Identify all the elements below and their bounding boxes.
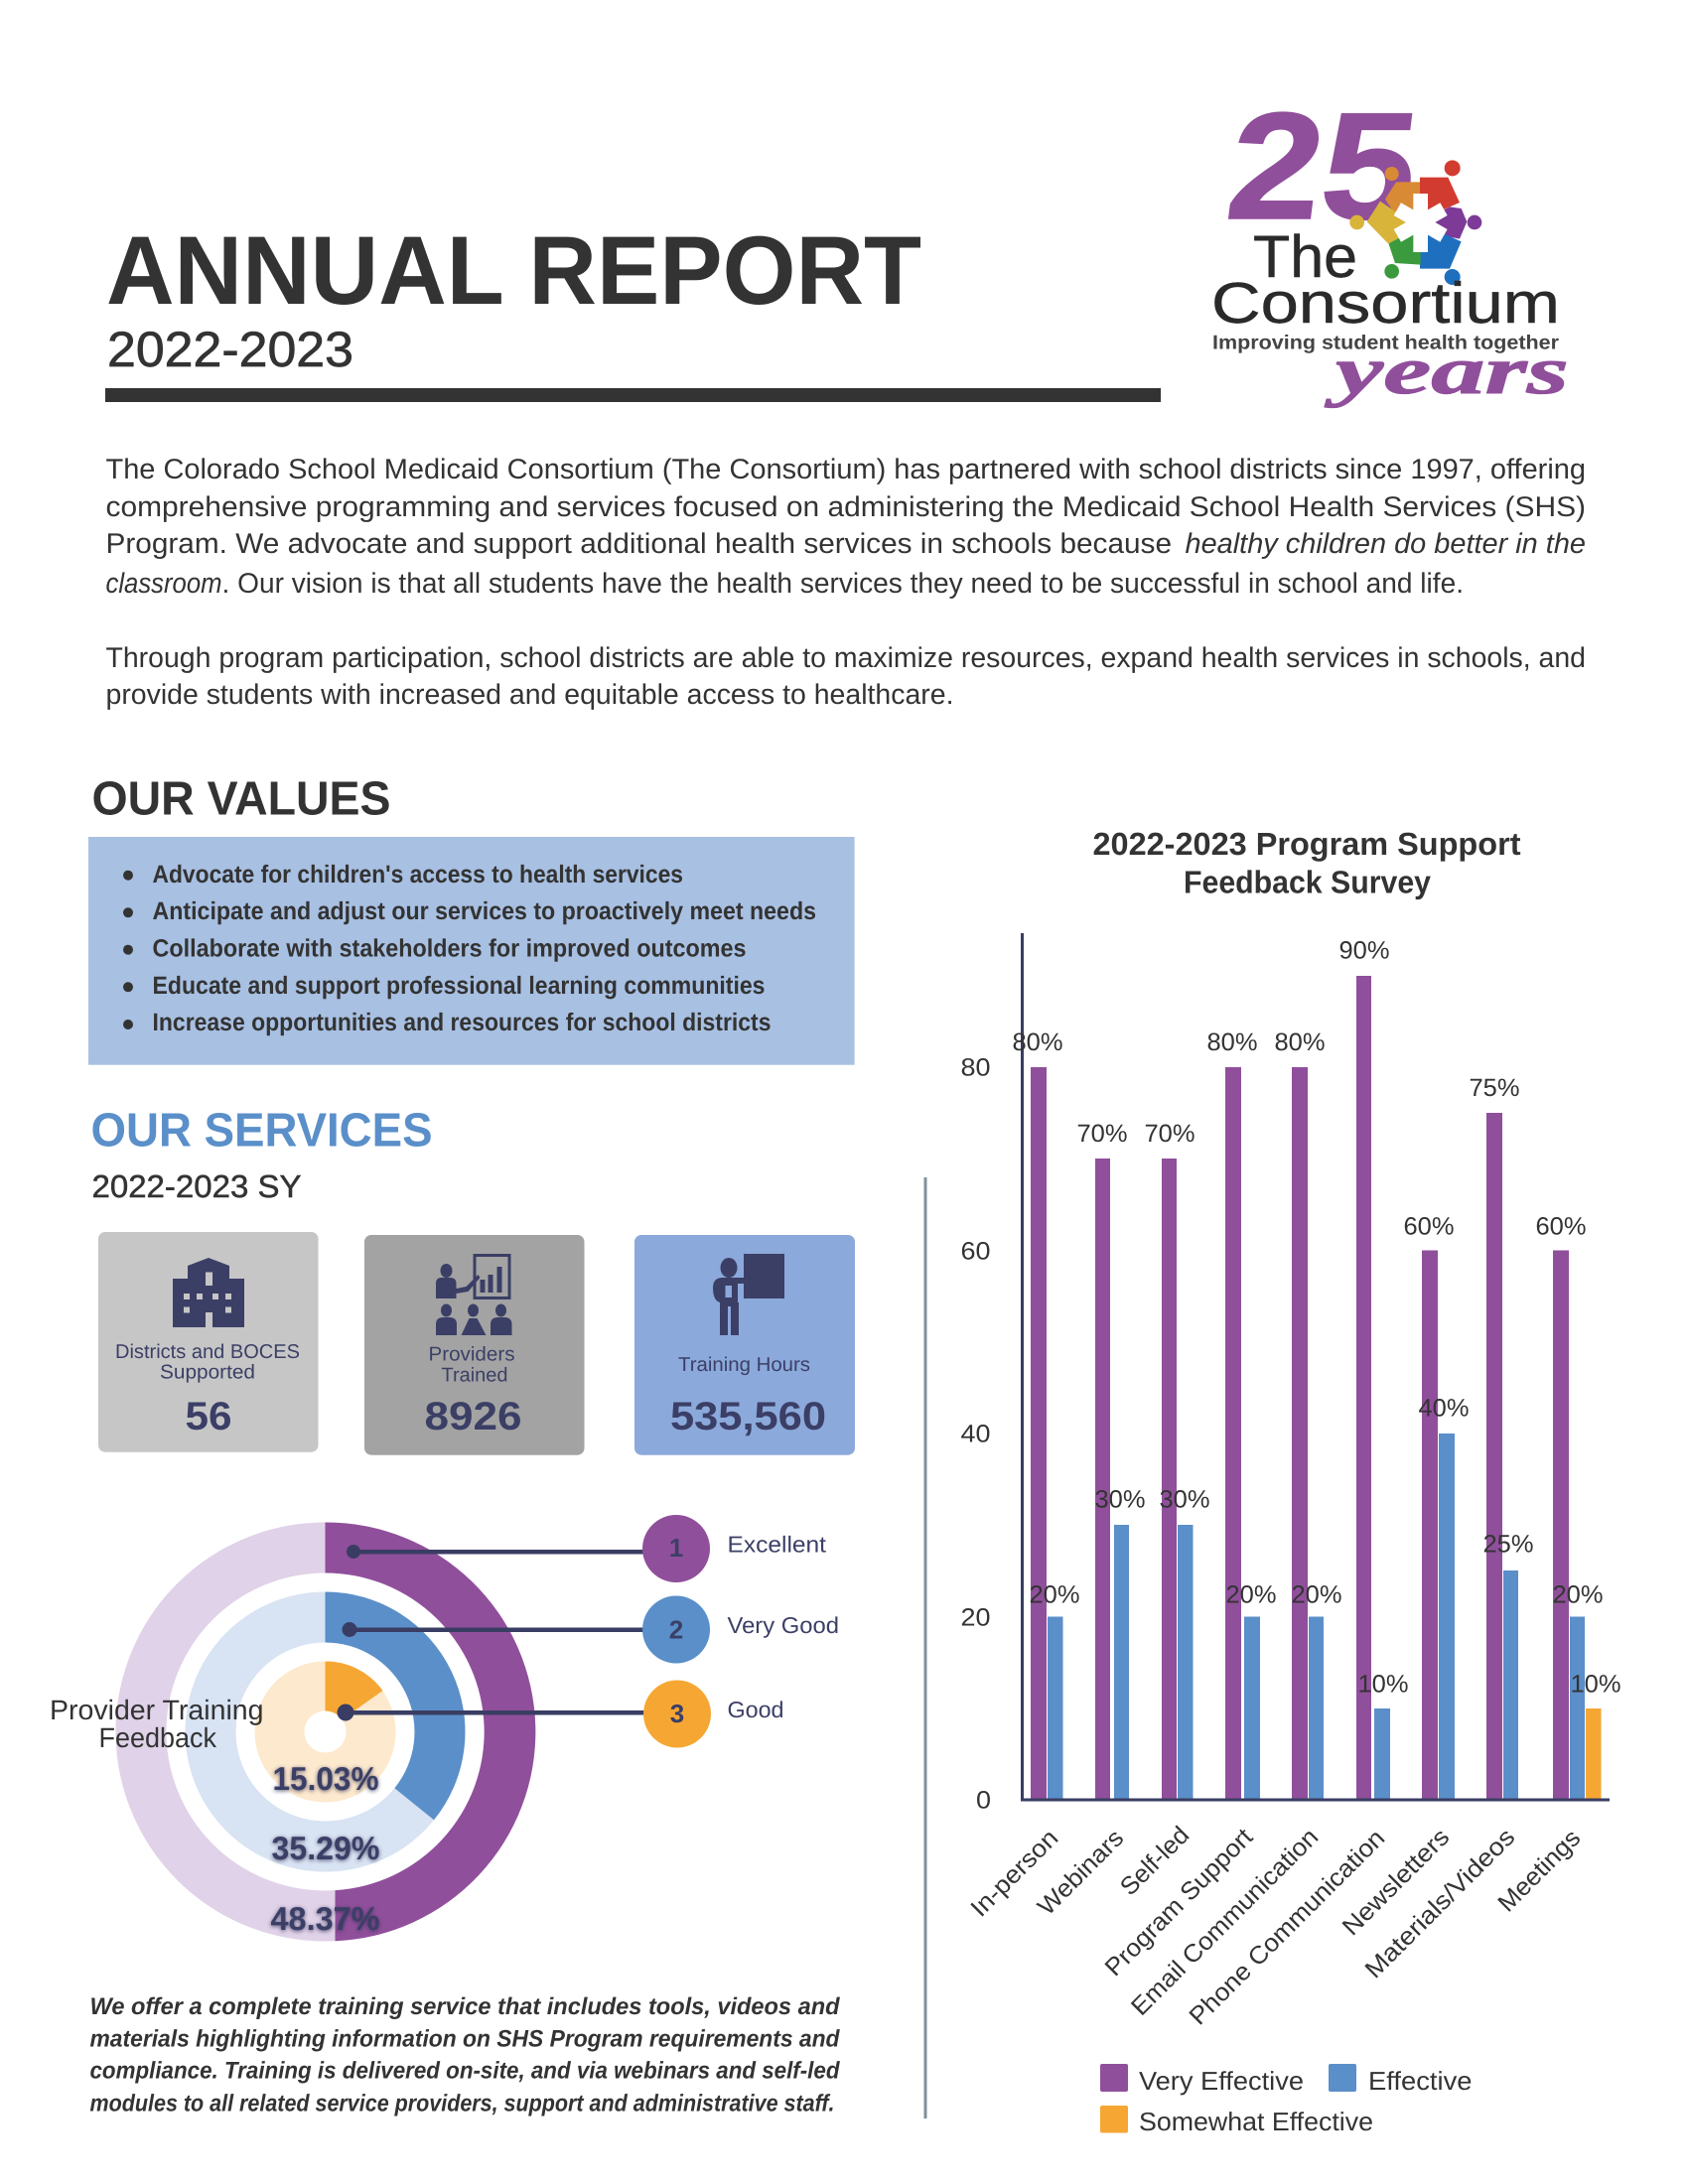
intro paragraph 2: Through program participation, school districts are able to maximize resources, expand health services in schools, and (105, 642, 1586, 674)
chart legend: Somewhat Effective (1139, 2107, 1373, 2136)
chart title: Feedback Survey (1184, 864, 1431, 899)
legend: good: Good (727, 1697, 784, 1722)
intro paragraph 1: The Colorado School Medicaid Consortium (The Consortium) has partnered with school districts since 1997, offering (105, 454, 1586, 485)
header rule (105, 388, 1161, 402)
card label: Providers (429, 1344, 514, 1366)
chart label (50, 1695, 264, 1753)
data labels: 80% (1013, 1028, 1062, 1056)
training description: compliance. Training is delivered on-site, and via webinars and self-led (89, 2057, 841, 2085)
data labels: 80% (1275, 1028, 1325, 1056)
category labels: Materials/Videos (1359, 1823, 1520, 1983)
title: ANNUAL REPORT (106, 215, 921, 325)
training description: We offer a complete training service that includes tools, videos and (89, 1993, 841, 2020)
intro paragraph 1: classroom (105, 568, 222, 600)
panel: values list: Advocate for children's access to health services (153, 861, 683, 888)
intro paragraph 1: comprehensive programming and services focused on administering the Medicaid School Health Services (SHS) (105, 491, 1586, 523)
intro paragraph 1: healthy children do better in the (1186, 528, 1586, 560)
intro paragraph 1 (105, 454, 1586, 600)
category labels: Meetings (1492, 1824, 1586, 1917)
heading: our values: OUR VALUES (91, 772, 391, 826)
subtitle: year: 2022-2023 (107, 322, 353, 377)
data labels: 25% (1483, 1531, 1533, 1559)
intro paragraph 2: provide students with increased and equitable access to healthcare. (105, 679, 953, 711)
chart: program support bar chart (961, 933, 1620, 2136)
chart title (1092, 826, 1521, 899)
data labels: 60% (1404, 1213, 1454, 1241)
logo: wordmark Consortium: Consortium (1211, 271, 1560, 336)
heading: our services: OUR SERVICES (91, 1104, 433, 1158)
data labels: 80% (1207, 1028, 1257, 1056)
legend: excellent (642, 1515, 827, 1582)
panel: values list: Educate and support professional learning communities (153, 972, 765, 1000)
y axis tick labels: 20 (961, 1604, 991, 1632)
data labels: 60% (1535, 1213, 1587, 1241)
data labels: 70% (1076, 1120, 1128, 1148)
chart: provider training feedback radial (50, 1515, 839, 1941)
data labels (1013, 937, 1620, 1698)
card label: Trained (441, 1364, 508, 1386)
category labels: Newsletters (1336, 1823, 1455, 1941)
data labels: 20% (1553, 1580, 1603, 1608)
icon: school building (173, 1258, 244, 1327)
data labels: 90% (1338, 937, 1390, 965)
chart legend (1100, 2064, 1472, 2136)
intro paragraph 1: . Our vision is that all students have the health services they need to be successful in school and life. (222, 568, 1464, 600)
intro paragraph 2 (105, 642, 1586, 711)
data labels: 20% (1291, 1580, 1342, 1608)
panel: training hours card (634, 1235, 855, 1455)
percentages (270, 1760, 379, 1937)
legend: very good: Very Good (727, 1612, 839, 1638)
y axis tick labels: 80 (961, 1054, 991, 1082)
percentages: 48.37% (270, 1900, 379, 1937)
training description: materials highlighting information on SHS Program requirements and (89, 2025, 841, 2053)
card label: Training Hours (678, 1354, 810, 1376)
data labels: 40% (1418, 1394, 1470, 1422)
panel: values list: Collaborate with stakeholders for improved outcomes (153, 935, 747, 963)
logo: wordmark The: The (1253, 223, 1357, 290)
chart legend: Effective (1368, 2066, 1472, 2096)
axes (1021, 933, 1610, 1801)
legend: excellent: Excellent (727, 1531, 827, 1557)
chart legend: Very Effective (1139, 2066, 1304, 2096)
very effective bars (1031, 976, 1569, 1800)
logo: years script: years (1325, 333, 1569, 408)
card label (429, 1344, 514, 1386)
chart title: 2022-2023 Program Support (1092, 826, 1521, 862)
y axis tick labels: 40 (961, 1420, 991, 1447)
card number: 56 (185, 1395, 232, 1438)
logo: 25 numeral: 25 (1219, 81, 1427, 251)
training description: modules to all related service providers, support and administrative staff. (89, 2091, 834, 2116)
card number: 535,560 (670, 1395, 826, 1438)
category labels: Self-led (1115, 1821, 1195, 1901)
category labels: Webinars (1033, 1824, 1129, 1921)
category labels: Phone Communication (1184, 1824, 1390, 2030)
ring: very good (211, 1592, 465, 1846)
percentages: 15.03% (272, 1760, 379, 1797)
logo: people emblem (1349, 160, 1481, 285)
logo: tagline: Improving student health together (1212, 332, 1559, 353)
ring: good (280, 1661, 383, 1777)
ring: excellent (141, 1522, 535, 1941)
card label (115, 1341, 300, 1384)
panel: values list: Anticipate and adjust our services to proactively meet needs (153, 897, 816, 925)
legend: very good: 2 (669, 1614, 683, 1644)
category labels: Email Communication (1126, 1823, 1324, 2021)
legend: good (643, 1680, 784, 1747)
category labels (965, 1821, 1586, 2030)
data labels: 20% (1225, 1580, 1277, 1608)
data labels: 20% (1029, 1580, 1080, 1608)
category labels: Program Support (1099, 1823, 1258, 1981)
icon: presenter and audience (436, 1255, 512, 1335)
somewhat effective bar (1586, 1708, 1601, 1800)
chart label: Provider Training (50, 1695, 264, 1725)
icon: trainer at board (713, 1254, 784, 1335)
panel: values list: Increase opportunities and resources for school districts (153, 1009, 771, 1036)
y axis tick labels (961, 1054, 991, 1815)
panel: districts card (98, 1232, 318, 1452)
data labels: 30% (1094, 1485, 1146, 1513)
data labels: 30% (1160, 1485, 1209, 1513)
logo: The Consortium 25 years (1211, 81, 1569, 408)
data labels: 10% (1571, 1670, 1620, 1698)
chart label: Feedback (99, 1722, 217, 1753)
percentages: 35.29% (272, 1830, 379, 1866)
subheading: school year: 2022-2023 SY (91, 1168, 302, 1204)
y axis tick labels: 60 (961, 1237, 991, 1265)
card label: Supported (160, 1362, 255, 1384)
legend: very good (642, 1596, 839, 1664)
legend: excellent: 1 (669, 1533, 683, 1563)
connector lines (338, 1545, 647, 1721)
panel: providers card (364, 1235, 584, 1455)
training description (89, 1993, 841, 2116)
card number: 8926 (425, 1395, 522, 1438)
column divider (923, 1177, 927, 2118)
data labels: 75% (1470, 1074, 1519, 1102)
data labels: 10% (1358, 1670, 1408, 1698)
legend: good: 3 (670, 1699, 684, 1728)
effective bars (1048, 1433, 1585, 1800)
data labels: 70% (1144, 1120, 1196, 1148)
y axis tick labels: 0 (976, 1787, 991, 1815)
card label: Districts and BOCES (115, 1341, 300, 1363)
intro paragraph 1: Program. We advocate and support additional health services in schools because (105, 528, 1172, 560)
category labels: In-person (965, 1824, 1063, 1922)
panel: values list (88, 837, 855, 1065)
